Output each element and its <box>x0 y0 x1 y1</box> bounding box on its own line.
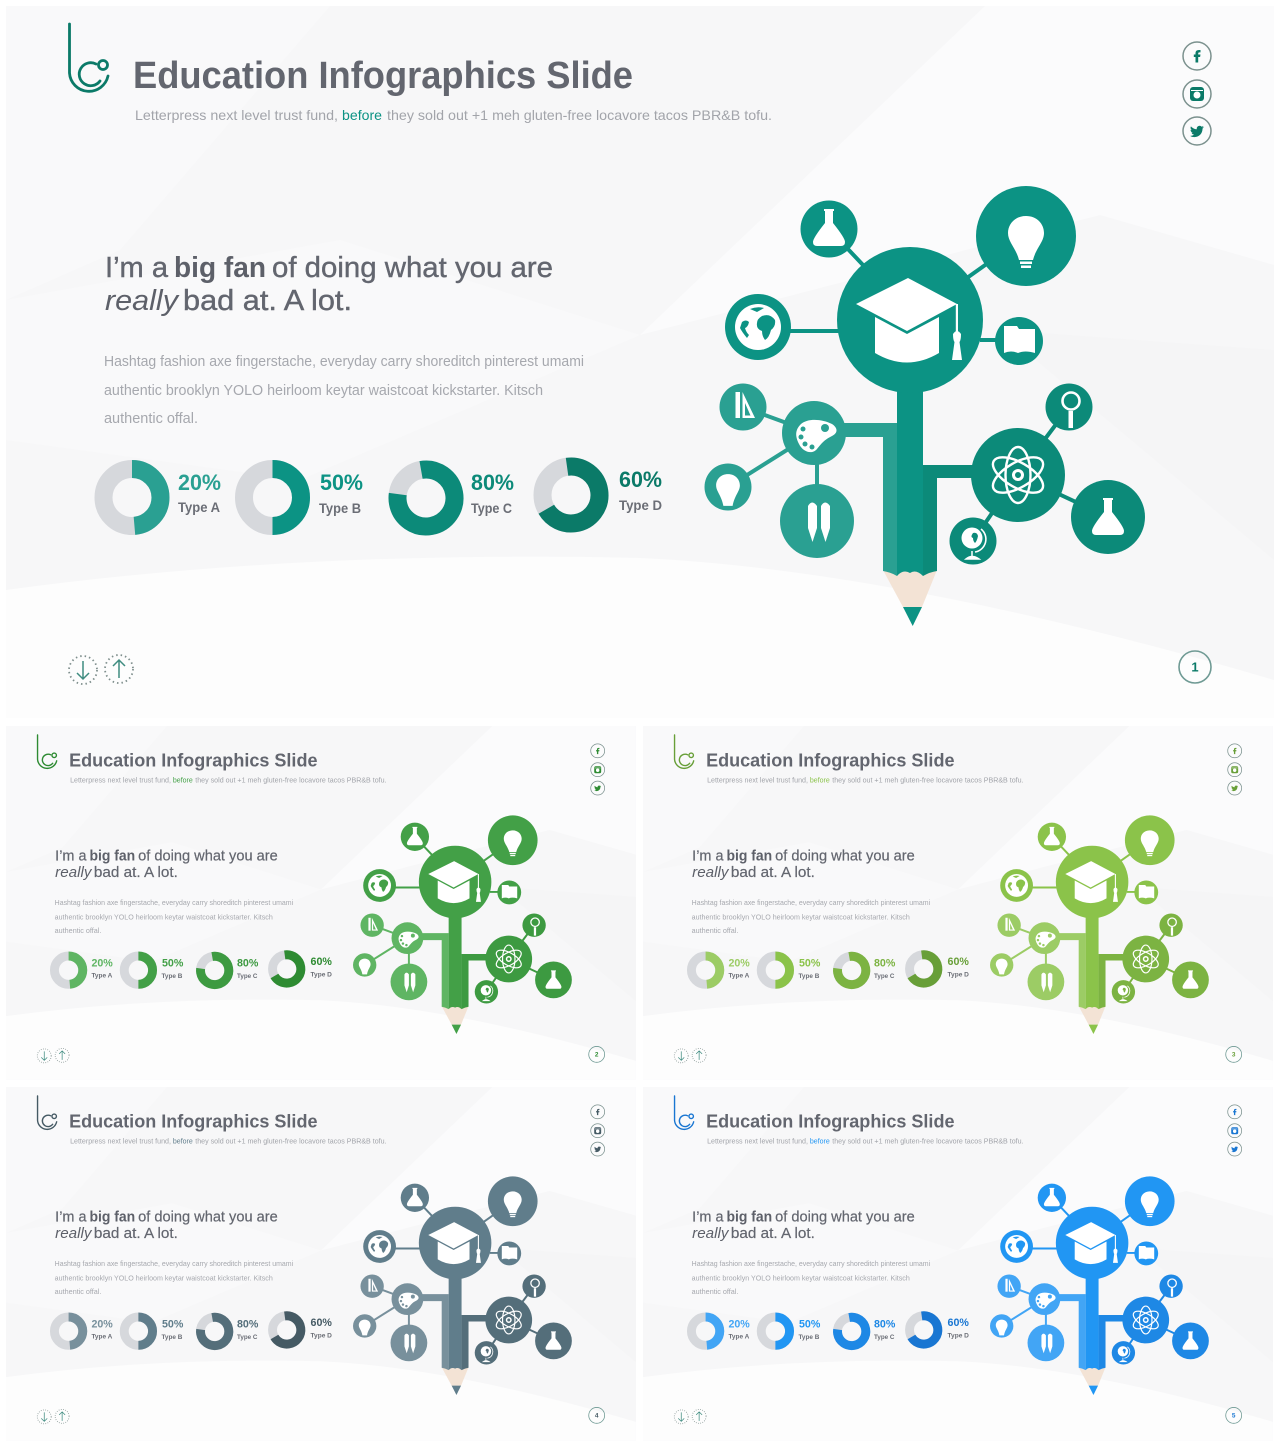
pencil left side and palette branch <box>840 423 897 576</box>
donut labels: Type D <box>311 971 332 978</box>
donut labels: 60% <box>619 467 662 492</box>
pencil right side and atom branch <box>923 465 980 576</box>
body text: Hashtag fashion axe fingerstache, everyday carry shoreditch pinterest umami <box>55 1259 294 1268</box>
social icons <box>1183 42 1211 145</box>
donut labels: Type A <box>728 972 749 979</box>
donut labels: 20% <box>728 1318 750 1330</box>
title: Education Infographics Slide <box>133 55 633 97</box>
node: graduation cap <box>837 247 983 393</box>
logo <box>38 1096 57 1129</box>
subtitle: they sold out +1 meh gluten-free locavore tacos PBR&B tofu. <box>832 778 1024 785</box>
slide art <box>6 1087 636 1441</box>
heading: big fan <box>174 252 266 284</box>
node: rulers <box>720 384 766 430</box>
subtitle: they sold out +1 meh gluten-free locavore tacos PBR&B tofu. <box>832 1139 1024 1146</box>
page number <box>1226 1407 1242 1423</box>
donut labels <box>91 956 332 980</box>
heading: I’m a <box>692 1210 723 1226</box>
body text: Hashtag fashion axe fingerstache, everyday carry shoreditch pinterest umami <box>55 898 294 907</box>
logo <box>70 24 108 91</box>
donut labels: 60% <box>311 1317 332 1329</box>
donut: type B <box>244 469 301 526</box>
title: Education Infographics Slide <box>706 1111 954 1132</box>
heading: I’m a <box>105 252 169 284</box>
heading: bad at. A lot. <box>94 1226 178 1242</box>
donut labels: Type C <box>237 973 258 980</box>
slide 2: green <box>6 726 636 1080</box>
donut labels: 60% <box>311 956 332 968</box>
heading: of doing what you are <box>775 849 915 865</box>
donut: type C <box>393 465 459 531</box>
slide art <box>6 726 636 1080</box>
node: pens <box>780 484 854 558</box>
connector lines <box>728 229 1108 541</box>
slide art <box>643 1087 1273 1441</box>
donut labels <box>728 956 969 980</box>
subtitle <box>707 1139 1024 1146</box>
title: Education Infographics Slide <box>69 750 317 771</box>
heading: bad at. A lot. <box>731 1226 815 1242</box>
donut labels: 50% <box>162 957 184 969</box>
heading: of doing what you are <box>138 849 278 865</box>
page number: 5 <box>1232 1413 1236 1420</box>
donut labels: Type B <box>161 1334 183 1341</box>
donut labels: 20% <box>728 957 750 969</box>
icon: arrow down <box>69 656 97 684</box>
body text <box>692 1259 931 1296</box>
donut labels: Type C <box>874 1334 895 1341</box>
heading <box>692 849 915 881</box>
slide 5: blue <box>643 1087 1273 1441</box>
heading: really <box>55 1226 92 1242</box>
donut labels: Type D <box>619 498 662 513</box>
node: globe <box>725 294 791 360</box>
subtitle <box>707 778 1024 785</box>
subtitle: before <box>173 778 193 785</box>
donut charts <box>691 1314 940 1348</box>
node: atom <box>971 428 1065 522</box>
slide 4: slate <box>6 1087 636 1441</box>
body text <box>55 1259 294 1296</box>
donut labels: 80% <box>237 957 259 969</box>
page number: 1 <box>1191 660 1199 674</box>
slide art <box>643 726 1273 1080</box>
pencil tree <box>990 815 1209 1034</box>
logo <box>675 735 694 768</box>
donut labels: Type A <box>91 1333 112 1340</box>
heading: really <box>55 865 92 881</box>
donut labels <box>728 1317 969 1341</box>
heading: of doing what you are <box>775 1210 915 1226</box>
body text: authentic offal. <box>55 926 101 935</box>
body text: authentic offal. <box>692 926 738 935</box>
donut labels: 80% <box>874 957 896 969</box>
icon: twitter <box>1183 117 1211 145</box>
pencil centre stem <box>897 380 923 576</box>
node: book <box>995 317 1043 365</box>
logo <box>38 735 57 768</box>
node: small bulb <box>704 464 752 510</box>
heading: bad at. A lot. <box>731 865 815 881</box>
body text: authentic brooklyn YOLO heirloom keytar waistcoat kickstarter. Kitsch <box>104 383 543 399</box>
donut charts <box>54 1314 303 1348</box>
donut labels: 50% <box>799 1318 821 1330</box>
page number: 3 <box>1232 1052 1236 1059</box>
node: palette <box>782 401 846 465</box>
subtitle: they sold out +1 meh gluten-free locavore tacos PBR&B tofu. <box>387 107 772 123</box>
heading: really <box>105 285 180 317</box>
node: flask small right <box>1071 480 1145 554</box>
navigation arrows <box>37 1048 69 1063</box>
donut labels: Type C <box>237 1334 258 1341</box>
subtitle: they sold out +1 meh gluten-free locavore tacos PBR&B tofu. <box>195 778 387 785</box>
body text: Hashtag fashion axe fingerstache, everyday carry shoreditch pinterest umami <box>692 1259 931 1268</box>
heading: big fan <box>89 849 135 865</box>
navigation arrows <box>37 1409 69 1424</box>
pencil lead <box>903 607 922 626</box>
heading: big fan <box>89 1210 135 1226</box>
subtitle: Letterpress next level trust fund, <box>70 1139 171 1146</box>
heading <box>692 1210 915 1242</box>
body text: authentic brooklyn YOLO heirloom keytar waistcoat kickstarter. Kitsch <box>55 912 273 921</box>
heading: of doing what you are <box>272 252 553 284</box>
donut labels <box>178 467 662 516</box>
donut labels: 80% <box>471 470 514 495</box>
social icons <box>591 744 605 795</box>
slide background <box>6 6 1274 718</box>
donut labels: 50% <box>320 470 363 495</box>
icon: arrow up <box>105 655 133 683</box>
donut labels: Type B <box>161 973 183 980</box>
page number <box>1179 651 1211 683</box>
donut: type A <box>104 469 160 526</box>
page number <box>589 1407 605 1423</box>
heading <box>105 252 553 317</box>
donut labels: 50% <box>799 957 821 969</box>
subtitle: Letterpress next level trust fund, <box>707 1139 808 1146</box>
donut labels: Type D <box>948 971 969 978</box>
donut labels: 20% <box>178 470 221 495</box>
subtitle: before <box>810 1139 830 1146</box>
body text: authentic offal. <box>692 1287 738 1296</box>
heading: bad at. A lot. <box>94 865 178 881</box>
slide 3: lime <box>643 726 1273 1080</box>
body text: authentic brooklyn YOLO heirloom keytar waistcoat kickstarter. Kitsch <box>55 1273 273 1282</box>
heading: bad at. A lot. <box>183 285 352 317</box>
subtitle: Letterpress next level trust fund, <box>70 778 171 785</box>
heading: I’m a <box>55 1210 86 1226</box>
node: light bulb large <box>976 186 1076 286</box>
slide 1: teal, large <box>6 6 1274 718</box>
body text <box>692 898 931 935</box>
donut labels: Type B <box>319 501 361 516</box>
donut labels: 80% <box>237 1318 259 1330</box>
navigation arrows <box>674 1048 706 1063</box>
donut labels <box>91 1317 332 1341</box>
subtitle <box>70 1139 387 1146</box>
subtitle: before <box>342 107 382 123</box>
body text: Hashtag fashion axe fingerstache, everyday carry shoreditch pinterest umami <box>104 354 584 370</box>
donut labels: 80% <box>874 1318 896 1330</box>
heading: big fan <box>726 849 772 865</box>
body text: Hashtag fashion axe fingerstache, everyday carry shoreditch pinterest umami <box>692 898 931 907</box>
page number: 2 <box>595 1052 599 1059</box>
donut labels: 20% <box>91 1318 113 1330</box>
node: desk globe <box>950 518 996 564</box>
subtitle: before <box>810 778 830 785</box>
subtitle <box>135 107 772 123</box>
donut labels: Type A <box>728 1333 749 1340</box>
body text: authentic offal. <box>55 1287 101 1296</box>
subtitle: they sold out +1 meh gluten-free locavore tacos PBR&B tofu. <box>195 1139 387 1146</box>
title: Education Infographics Slide <box>706 750 954 771</box>
donut labels: Type B <box>798 1334 820 1341</box>
body text <box>55 898 294 935</box>
donut labels: 50% <box>162 1318 184 1330</box>
donut: type D <box>539 463 603 527</box>
donut charts <box>104 463 603 531</box>
body text: authentic brooklyn YOLO heirloom keytar waistcoat kickstarter. Kitsch <box>692 912 910 921</box>
navigation arrows <box>674 1409 706 1424</box>
donut labels: Type C <box>471 501 512 516</box>
social icons <box>1228 1105 1242 1156</box>
logo <box>675 1096 694 1129</box>
page number <box>589 1046 605 1062</box>
heading: big fan <box>726 1210 772 1226</box>
donut charts <box>691 953 940 987</box>
donut charts <box>54 953 303 987</box>
pencil wood tip <box>883 570 937 607</box>
page number: 4 <box>595 1413 599 1420</box>
heading: I’m a <box>55 849 86 865</box>
node: magnifier <box>1046 384 1092 430</box>
donut labels: Type D <box>948 1332 969 1339</box>
heading <box>55 849 278 881</box>
donut labels: Type B <box>798 973 820 980</box>
social icons <box>591 1105 605 1156</box>
icon: facebook <box>1183 42 1211 70</box>
subtitle <box>70 778 387 785</box>
pencil tree <box>353 815 572 1034</box>
navigation arrows <box>69 655 133 684</box>
donut labels: Type C <box>874 973 895 980</box>
heading <box>55 1210 278 1242</box>
subtitle: Letterpress next level trust fund, <box>707 778 808 785</box>
heading: I’m a <box>692 849 723 865</box>
heading: really <box>692 865 729 881</box>
donut labels: Type A <box>91 972 112 979</box>
pencil tree <box>353 1176 572 1395</box>
page number <box>1226 1046 1242 1062</box>
donut labels: 60% <box>948 1317 969 1329</box>
body text <box>104 354 584 427</box>
heading: of doing what you are <box>138 1210 278 1226</box>
social icons <box>1228 744 1242 795</box>
title: Education Infographics Slide <box>69 1111 317 1132</box>
pencil tree <box>990 1176 1209 1395</box>
body text: authentic offal. <box>104 411 198 427</box>
donut labels: 60% <box>948 956 969 968</box>
subtitle: Letterpress next level trust fund, <box>135 107 338 123</box>
node: flask <box>800 200 858 258</box>
subtitle: before <box>173 1139 193 1146</box>
body text: authentic brooklyn YOLO heirloom keytar waistcoat kickstarter. Kitsch <box>692 1273 910 1282</box>
donut labels: Type A <box>178 500 220 515</box>
pencil tree <box>704 186 1145 626</box>
icon: instagram <box>1183 80 1211 108</box>
donut labels: Type D <box>311 1332 332 1339</box>
donut labels: 20% <box>91 957 113 969</box>
heading: really <box>692 1226 729 1242</box>
